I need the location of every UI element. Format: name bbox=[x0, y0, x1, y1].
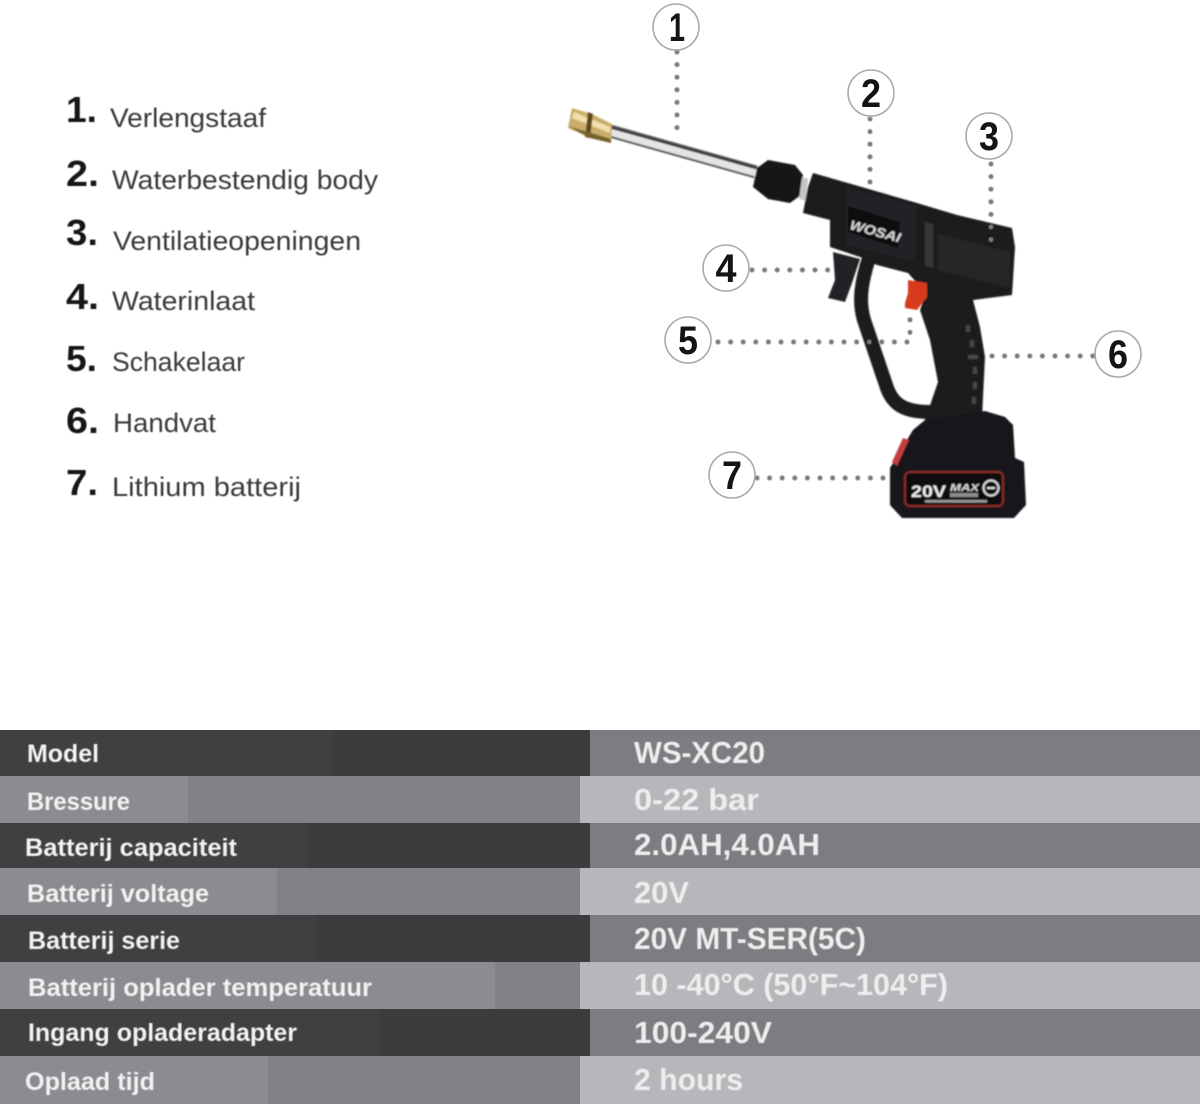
callout 3: 3 bbox=[979, 115, 999, 159]
parts legend list bbox=[66, 89, 379, 503]
callout 6: 6 bbox=[1108, 333, 1128, 377]
legend item 5 bbox=[66, 338, 245, 379]
battery label: 20V bbox=[911, 482, 947, 501]
front handle loop bbox=[861, 258, 930, 412]
brand name: WOSAI bbox=[848, 217, 903, 245]
legend item 3 bbox=[66, 212, 361, 256]
row: Bressure: 0-22 bar bbox=[634, 782, 759, 817]
legend item 1: 1. bbox=[66, 89, 97, 130]
callout 7 bbox=[709, 452, 755, 498]
legend item 6: 6. bbox=[66, 400, 99, 441]
pressure washer gun illustration bbox=[568, 108, 1026, 518]
legend item 3: Ventilatieopeningen bbox=[113, 226, 361, 256]
legend item 1: Verlengstaaf bbox=[110, 103, 267, 133]
callout 4 bbox=[703, 245, 749, 291]
body side panels bbox=[846, 187, 1010, 288]
legend item 6 bbox=[66, 400, 216, 441]
row: Oplaad tijd: 2 hours bbox=[634, 1062, 743, 1097]
row: Batterij capaciteit: Batterij capaciteit bbox=[25, 834, 238, 862]
legend item 3: 3. bbox=[66, 212, 98, 253]
row: Batterij serie bbox=[0, 915, 1200, 962]
row: Ingang opladeradapter bbox=[0, 1009, 1200, 1056]
battery label bbox=[911, 480, 998, 502]
callout leader lines bbox=[677, 52, 1096, 478]
row: Batterij oplader temperatuur: Batterij oplader temperatuur bbox=[28, 974, 372, 1002]
row: Batterij oplader temperatuur: 10 -40°C (50°F~104°F) bbox=[634, 967, 948, 1002]
callout 4: 4 bbox=[716, 247, 737, 291]
legend item 2: Waterbestendig body bbox=[112, 165, 379, 195]
callout 3 bbox=[966, 113, 1012, 159]
gun body and grip bbox=[803, 173, 1015, 420]
legend item 7: 7. bbox=[66, 462, 98, 503]
row: Ingang opladeradapter: 100-240V bbox=[634, 1015, 772, 1050]
legend item 5: 5. bbox=[66, 338, 97, 379]
grip details bbox=[966, 325, 978, 404]
callout 6 bbox=[1095, 331, 1141, 377]
legend item 4 bbox=[66, 276, 256, 317]
legend item 6: Handvat bbox=[113, 408, 216, 438]
row: Batterij voltage bbox=[0, 868, 1200, 915]
battery label: MAX bbox=[950, 483, 981, 494]
legend item 4: 4. bbox=[66, 276, 99, 317]
callout 1 bbox=[653, 4, 699, 50]
row: Batterij voltage: 20V bbox=[634, 875, 689, 910]
legend item 5: Schakelaar bbox=[112, 347, 245, 377]
legend item 4: Waterinlaat bbox=[112, 286, 256, 316]
row: Batterij serie: 20V MT-SER(5C) bbox=[634, 921, 866, 956]
row: Bressure bbox=[0, 776, 1200, 823]
row: Batterij oplader temperatuur bbox=[0, 962, 1200, 1009]
callout 2 bbox=[848, 70, 894, 116]
row: Oplaad tijd bbox=[0, 1056, 1200, 1104]
legend item 1 bbox=[66, 89, 267, 133]
legend item 2: 2. bbox=[66, 153, 99, 194]
callout 5: 5 bbox=[678, 319, 698, 363]
row: Batterij capaciteit: 2.0AH,4.0AH bbox=[634, 827, 820, 862]
row: Model bbox=[0, 730, 1200, 776]
extension wand tube bbox=[610, 128, 756, 173]
row: Ingang opladeradapter: Ingang opladeradapter bbox=[28, 1019, 297, 1047]
callout 5 bbox=[665, 317, 711, 363]
red trigger bbox=[905, 280, 927, 310]
legend item 2 bbox=[66, 153, 379, 195]
legend item 7: Lithium batterij bbox=[112, 472, 301, 502]
row: Model: WS-XC20 bbox=[634, 735, 765, 770]
specification table bbox=[0, 730, 1200, 1104]
callout 2: 2 bbox=[861, 72, 881, 116]
chuck collar bbox=[753, 160, 803, 203]
row: Batterij capaciteit bbox=[0, 823, 1200, 868]
legend item 7 bbox=[66, 462, 301, 503]
row: Bressure: Bressure bbox=[27, 788, 130, 816]
callout 1: 1 bbox=[669, 6, 685, 50]
callout 7: 7 bbox=[722, 454, 742, 498]
row: Batterij voltage: Batterij voltage bbox=[27, 880, 209, 908]
row: Batterij serie: Batterij serie bbox=[28, 927, 180, 955]
row: Model: Model bbox=[27, 740, 99, 768]
water inlet bbox=[828, 252, 860, 302]
row: Oplaad tijd: Oplaad tijd bbox=[25, 1068, 155, 1096]
brass nozzle bbox=[568, 108, 612, 143]
battery pack bbox=[890, 411, 1026, 518]
